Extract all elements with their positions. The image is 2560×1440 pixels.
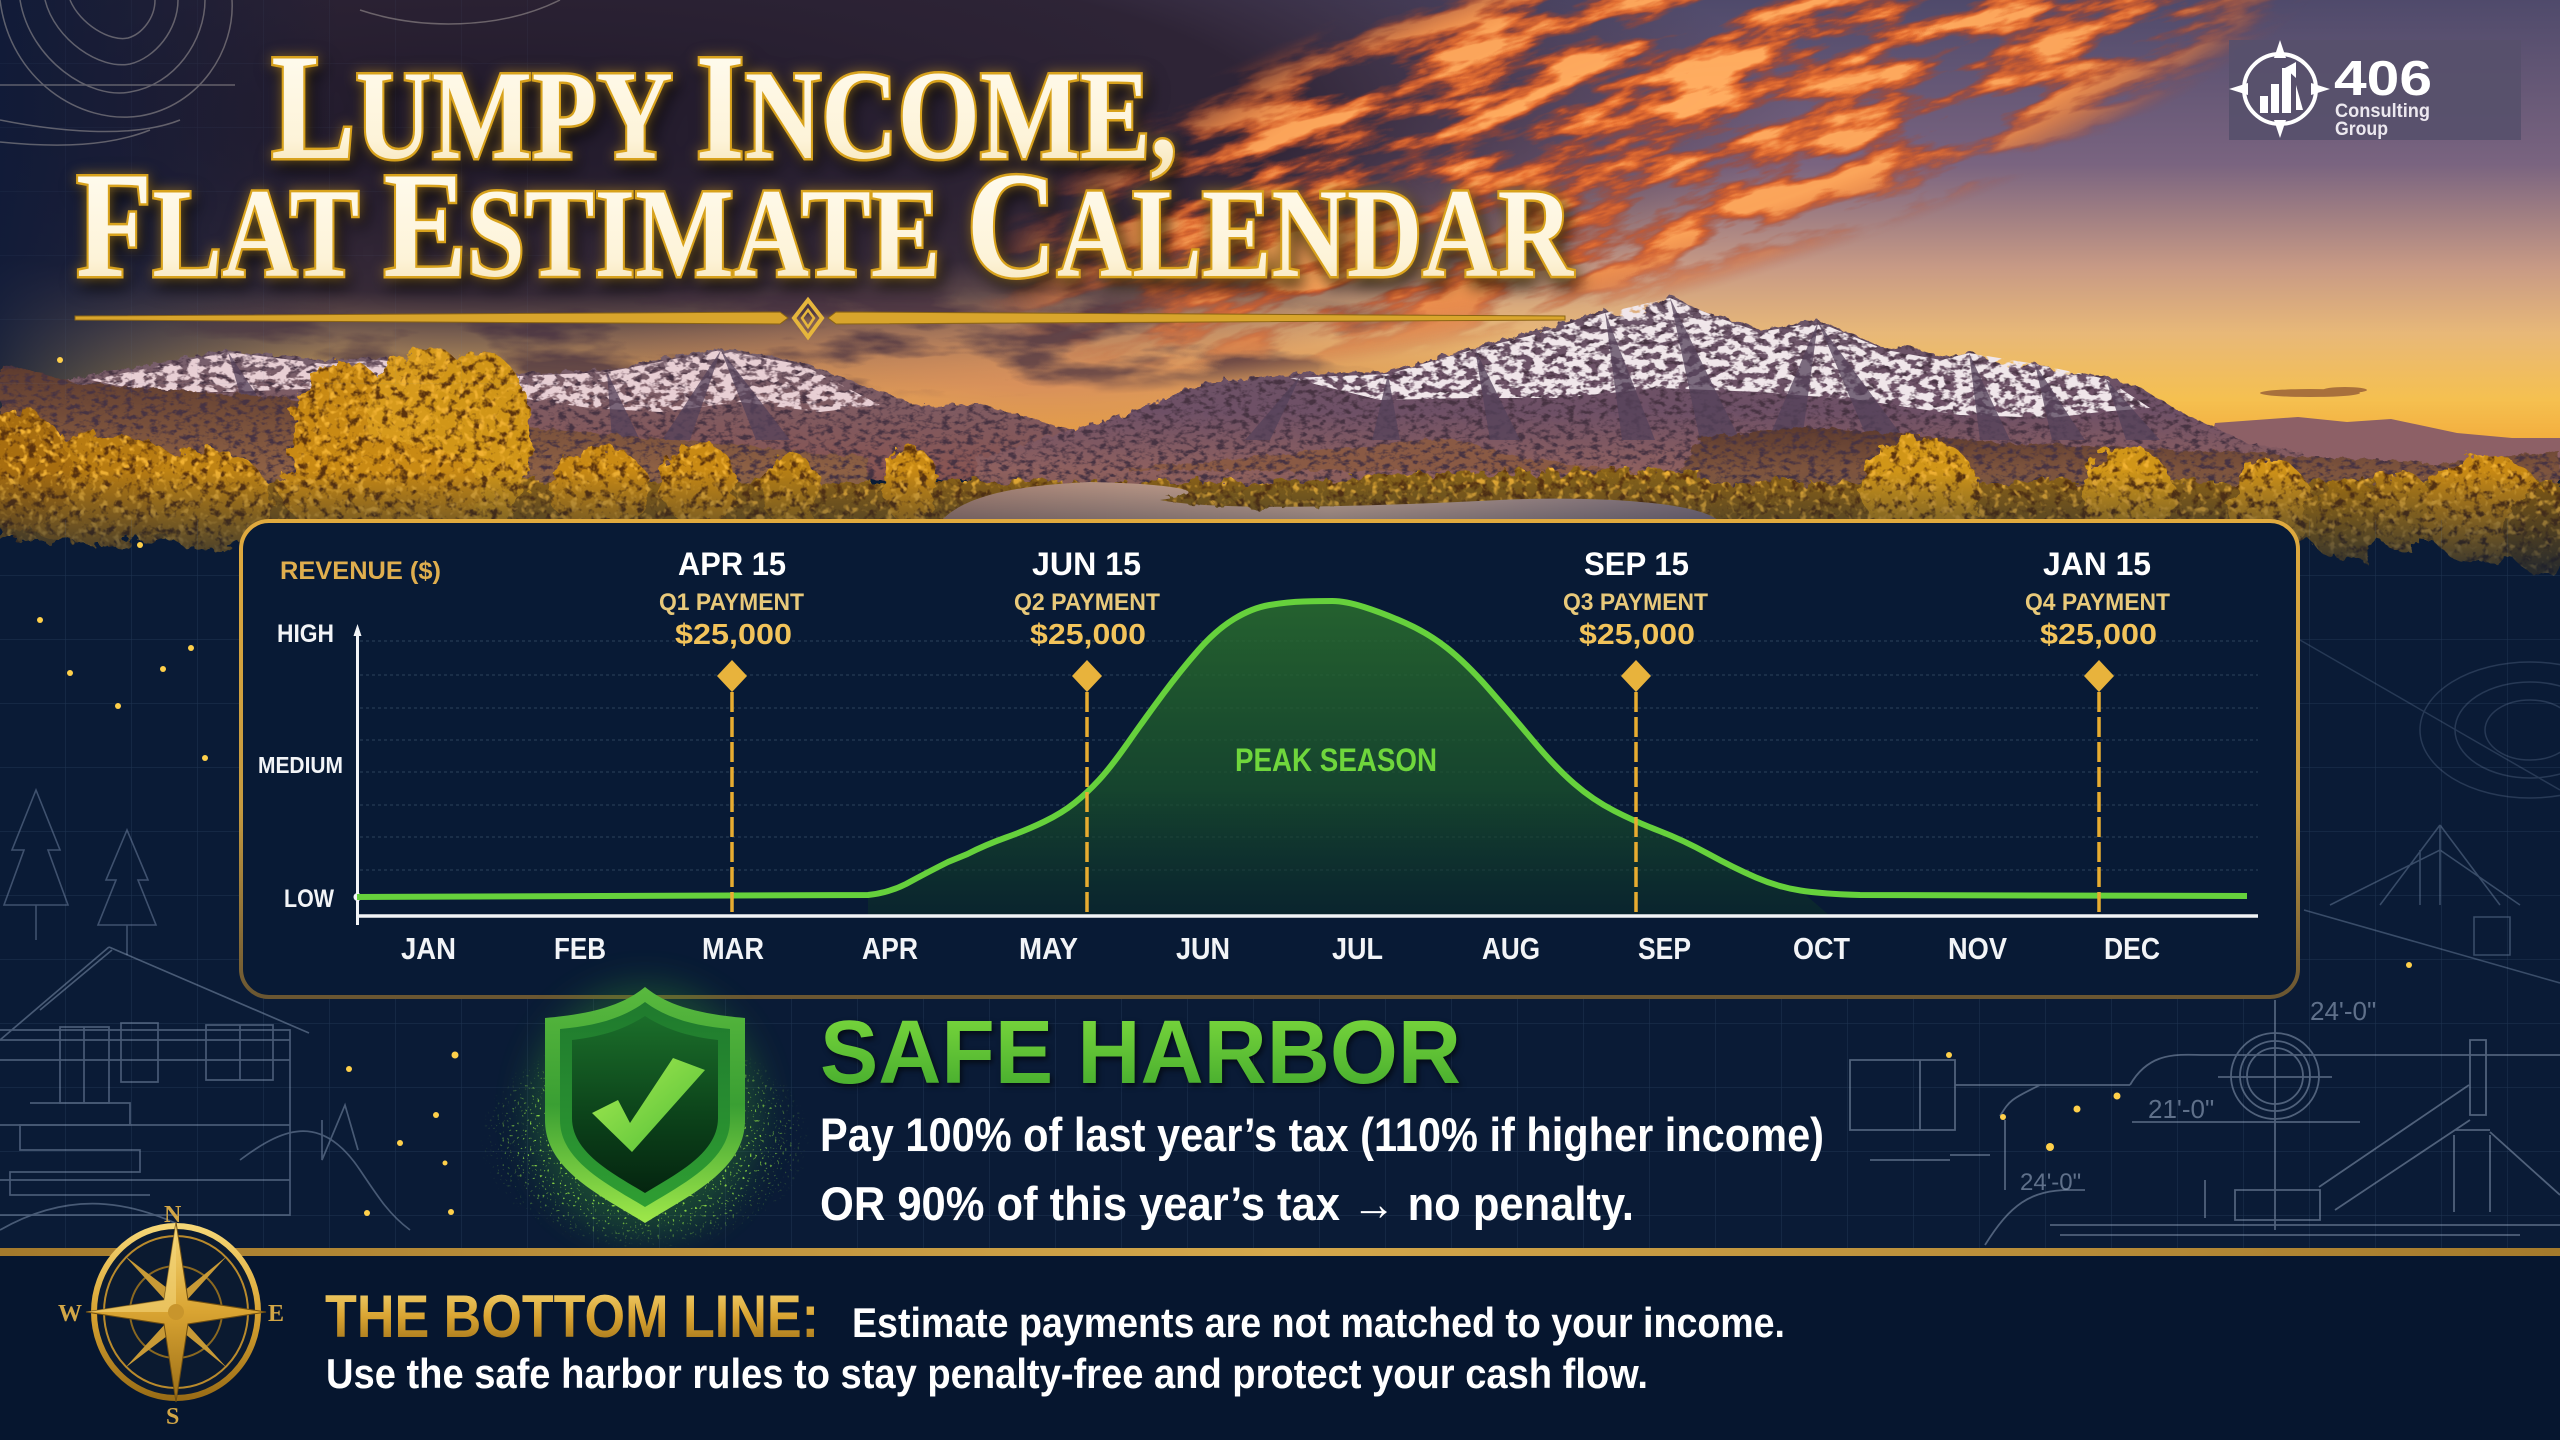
blueprint: machine and stair sketch [1850,1000,2560,1245]
background: topographic sketch lines [0,0,560,145]
safe harbor rule text: Pay 100% of last year’s tax (110% if higher income) [820,1108,1824,1161]
marker: Q4 payment [2025,546,2170,916]
marker: Q1 payment: Q1 PAYMENT [659,589,804,616]
axis labels: LOW [284,885,334,913]
icon: safe harbor shield [480,985,810,1250]
logo: 406 Consulting Group: 406 [2334,52,2432,106]
rock ribs on peaks [228,298,2160,440]
marker: Q4 payment: JAN 15 [2043,546,2151,582]
peak season area [868,601,1830,916]
marker: Q3 payment: Q3 PAYMENT [1563,589,1708,616]
month labels: MAR [702,931,764,966]
month labels: APR [862,931,918,966]
safe harbor rule text [820,1108,1824,1230]
marker: Q4 payment: $25,000 [2040,619,2157,651]
icon: compass rose [58,1202,284,1430]
marker: Q2 payment: $25,000 [1030,619,1146,651]
logo compass mark [2229,40,2330,138]
axis labels: HIGH [277,620,334,648]
snow on peaks [90,298,2150,418]
axes [354,624,2258,925]
month labels: DEC [2104,931,2160,966]
month labels: MAY [1019,931,1078,966]
title [76,23,1574,309]
marker: Q3 payment [1563,546,1708,916]
month labels: SEP [1638,931,1691,966]
bottom line text [325,1283,1785,1397]
axis labels: REVENUE ($) [280,557,441,585]
chart gridlines [360,641,2258,870]
fireflies [37,357,2412,1216]
month labels [401,931,2160,966]
title: FLAT ESTIMATE CALENDAR [76,141,1574,309]
month labels: JUL [1332,931,1383,966]
blueprint dimension labels: 24'-0" [2310,996,2376,1026]
marker: Q1 payment: $25,000 [675,619,792,651]
month labels: NOV [1948,931,2007,966]
blueprint: bridge [2304,825,2560,983]
marker: Q2 payment [1014,546,1160,916]
blueprint: pine trees [4,790,156,955]
blueprint dimension labels: 24'-0" [2020,1169,2081,1196]
logo: 406 Consulting Group [2229,40,2521,140]
panel: revenue chart [241,521,2298,997]
month labels: AUG [1482,931,1540,966]
month labels: FEB [554,931,606,966]
marker: Q2 payment: JUN 15 [1032,546,1141,582]
blueprint: house [0,947,410,1230]
title: LUMPY INCOME, [271,23,1177,191]
bottom line text: THE BOTTOM LINE: [325,1283,819,1350]
title divider [75,300,1565,337]
safe harbor rule text: OR 90% of this year’s tax → no penalty. [820,1177,1634,1230]
icon: compass rose: E [268,1301,284,1327]
marker: Q4 payment: Q4 PAYMENT [2025,589,2170,616]
checkmark [592,1058,705,1152]
axis labels [258,557,441,913]
background: mountains [0,295,2560,520]
axis labels: MEDIUM [258,752,343,778]
background: sunset sky [0,0,2560,487]
marker: Q3 payment: $25,000 [1579,619,1695,651]
blueprint dimension labels [2020,996,2376,1196]
marker: Q3 payment: SEP 15 [1584,546,1689,582]
month labels: OCT [1793,931,1850,966]
month labels: JUN [1176,931,1230,966]
month labels: JAN [401,931,456,966]
revenue curve [357,601,2247,897]
safe harbor heading: SAFE HARBOR [820,1003,1461,1103]
icon: compass rose: S [166,1404,179,1430]
marker: Q2 payment: Q2 PAYMENT [1014,589,1160,616]
peak season label: PEAK SEASON [1235,742,1437,778]
marker: Q1 payment [659,546,804,916]
blueprint dimension labels: 21'-0" [2148,1094,2214,1124]
icon: compass rose: W [58,1301,82,1327]
icon: compass rose: N [164,1202,182,1228]
marker: Q1 payment: APR 15 [678,546,786,582]
bottom line text: Use the safe harbor rules to stay penalty-free and protect your cash flow. [326,1350,1648,1397]
bottom line text: Estimate payments are not matched to your income. [852,1299,1785,1346]
logo: 406 Consulting Group: Consulting [2335,101,2430,122]
background: golden trees [0,348,2560,575]
blueprint: topographic contours [2300,640,2560,798]
logo: 406 Consulting Group: Group [2335,119,2388,140]
bottom band [0,1248,2560,1440]
background: river and treeline [0,470,2560,540]
